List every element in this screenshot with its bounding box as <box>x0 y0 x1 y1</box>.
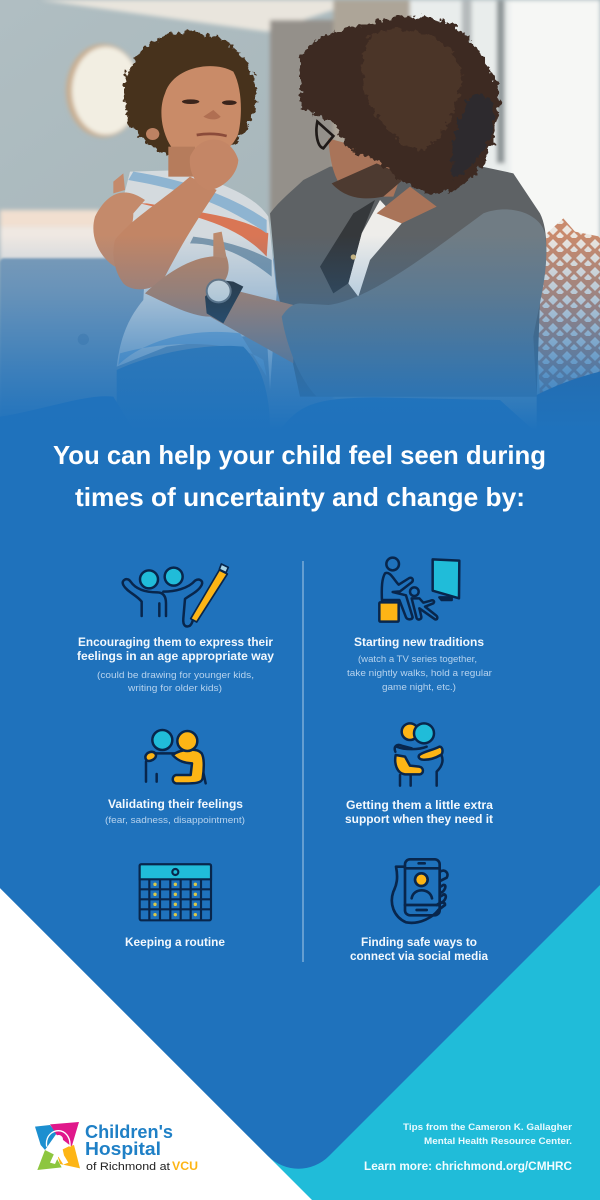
text: tip 6: Finding safe ways to <box>361 935 477 949</box>
text: tip 1: writing for older kids) <box>127 683 222 694</box>
text: tip 1: feelings in an age appropriate way <box>77 649 274 663</box>
text: tip 2: take nightly walks, hold a regular <box>347 668 492 679</box>
text: tip 5: Keeping a routine <box>125 935 225 949</box>
tip: validating feelings <box>105 730 245 826</box>
man hair <box>300 16 499 194</box>
text: tip 6 <box>350 935 488 963</box>
logo wordmark: VCU <box>172 1159 198 1173</box>
text: tip 2: Starting new traditions <box>354 635 484 649</box>
footer credit and link: Learn more: chrichmond.org/CMHRC <box>364 1159 572 1173</box>
icon: calendar <box>140 864 211 920</box>
icon: logo mark <box>35 1122 80 1170</box>
text: tip 1: Encouraging them to express their <box>78 635 273 649</box>
icon: hug <box>395 723 443 786</box>
icon: children and pencil <box>123 564 228 626</box>
text: tip 6: connect via social media <box>350 949 488 963</box>
tip: new traditions <box>347 558 492 693</box>
man's sleeve <box>282 209 546 397</box>
text: tip 3: (fear, sadness, disappointment) <box>105 815 245 826</box>
footer white corner <box>0 888 312 1200</box>
text: tip 3 <box>105 797 245 826</box>
tip: encouraging expression <box>77 564 274 694</box>
tip: keeping a routine <box>125 864 225 949</box>
logo wordmark: Children's <box>85 1122 173 1142</box>
man <box>270 163 546 397</box>
text: tip 2 <box>347 635 492 693</box>
text: tip 1: (could be drawing for younger kids, <box>97 670 254 681</box>
logo wordmark: Hospital <box>85 1139 161 1159</box>
footer credit and link: Mental Health Resource Center. <box>424 1136 572 1147</box>
heading: You can help your child feel seen during <box>53 440 546 470</box>
tip: social media <box>350 859 488 963</box>
column divider <box>302 561 304 962</box>
central blue pointed panel <box>0 430 600 1169</box>
sofa right and pillow <box>537 218 600 395</box>
icon: family watching TV <box>379 558 459 622</box>
icon: hand holding phone <box>392 859 447 923</box>
footer credit and link <box>364 1122 572 1173</box>
heading: times of uncertainty and change by: <box>75 482 525 512</box>
logo wordmark <box>85 1122 198 1173</box>
text: tip 3: Validating their feelings <box>108 797 243 811</box>
text: tip 1 <box>77 635 274 694</box>
text: tip 2: (watch a TV series together, <box>358 654 477 665</box>
text: tip 4: support when they need it <box>345 812 493 826</box>
heading <box>53 440 546 512</box>
hero photo: father and child on sofa <box>0 0 600 430</box>
tip: extra support <box>345 723 493 826</box>
boy <box>115 170 277 390</box>
text: tip 4 <box>345 798 493 826</box>
text: tip 2: game night, etc.) <box>382 682 456 693</box>
man's hand and forearm <box>145 256 293 363</box>
icon: comforting arm on shoulder <box>145 730 206 783</box>
text: tip 4: Getting them a little extra <box>346 798 493 812</box>
footer credit and link: Tips from the Cameron K. Gallagher <box>403 1122 572 1133</box>
footer cyan corner <box>230 885 600 1200</box>
lap foreground <box>280 397 533 430</box>
logo: Children's Hospital of Richmond at VCU <box>35 1122 198 1173</box>
logo wordmark: of Richmond at <box>86 1161 170 1173</box>
